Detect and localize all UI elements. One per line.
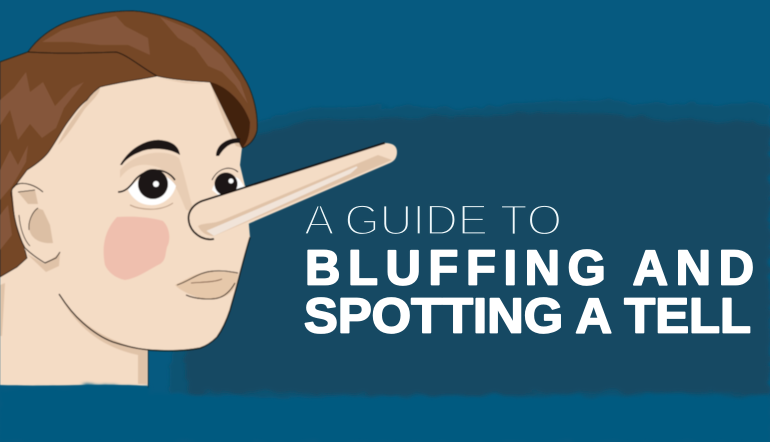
painted dark panel bbox=[186, 112, 770, 395]
ear bbox=[11, 183, 60, 272]
long nose bbox=[188, 143, 397, 239]
hair parting line bbox=[28, 52, 157, 76]
right eyebrow bbox=[216, 138, 240, 156]
mouth bbox=[175, 271, 238, 299]
title bbox=[304, 196, 754, 344]
lobe highlight bbox=[42, 16, 248, 104]
left eyebrow bbox=[120, 140, 180, 165]
title line 3: SPOTTING A TELL bbox=[304, 290, 751, 344]
neck and face skin bbox=[0, 76, 250, 386]
left eye bbox=[118, 169, 176, 209]
bottom paint edge bbox=[0, 386, 770, 442]
painted mid-tone panel edge bbox=[170, 100, 770, 400]
right eye bbox=[212, 168, 246, 198]
neck shadow bbox=[0, 283, 147, 384]
lower hair highlight bbox=[0, 72, 84, 250]
hair bbox=[0, 11, 257, 277]
blush bbox=[104, 217, 169, 280]
title line 2: BLUFFING AND bbox=[305, 242, 754, 296]
hair silhouette bbox=[0, 11, 257, 277]
illustrated face bbox=[0, 11, 397, 388]
forehead shadow bbox=[58, 78, 242, 148]
eye socket shadow bbox=[120, 153, 194, 212]
hair dark underside bbox=[210, 82, 250, 148]
title line 1: A GUIDE TO bbox=[304, 196, 562, 244]
neck outline bbox=[147, 350, 149, 388]
jaw line bbox=[59, 237, 250, 351]
